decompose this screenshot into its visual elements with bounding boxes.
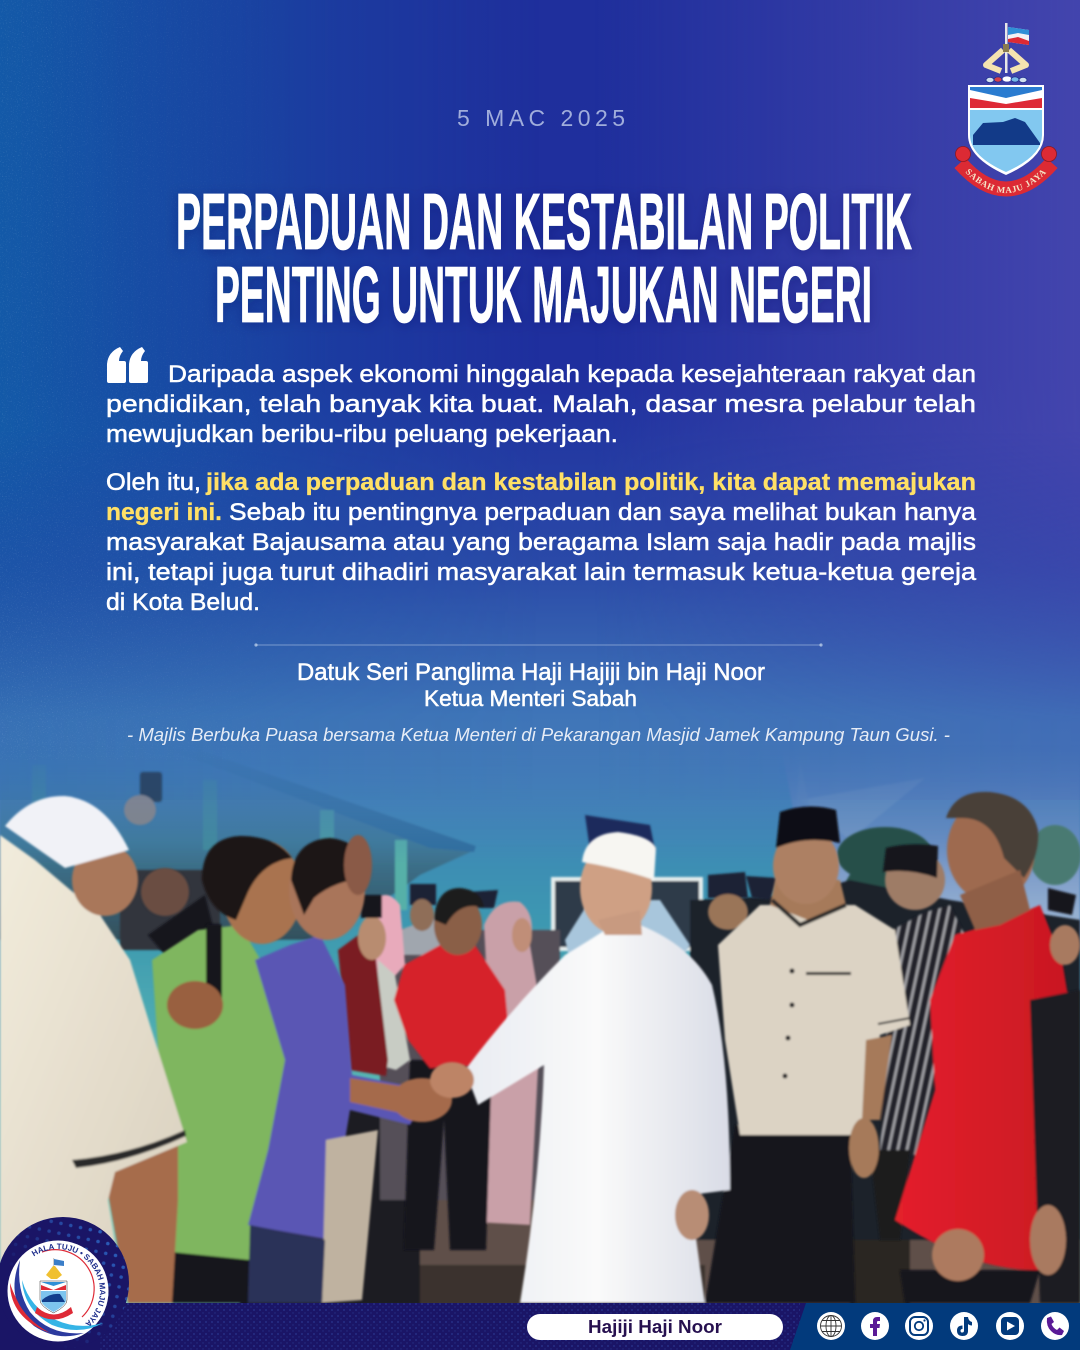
attribution: Ketua Menteri Sabah	[424, 686, 637, 711]
date: 5 MAC 2025	[457, 105, 625, 131]
icon: phone	[1041, 1312, 1069, 1340]
man in striped shirt	[870, 844, 970, 1240]
event caption: - Majlis Berbuka Puasa bersama Ketua Menteri di Pekarangan Masjid Jamek Kampung Taun Gusi. -	[127, 725, 950, 745]
flag and pole	[1005, 23, 1029, 73]
icon: facebook	[861, 1312, 889, 1340]
quote paragraph two with highlight: ini, tetapi juga turut dihadiri masyarakat lain termasuk ketua-ketua gereja	[106, 559, 976, 586]
social icons	[817, 1312, 1069, 1340]
attribution: Datuk Seri Panglima Haji Hajiji bin Haji Noor	[297, 659, 765, 686]
background person: woman left	[141, 868, 189, 916]
ground	[380, 1195, 1080, 1305]
quote paragraph two with highlight: di Kota Belud.	[106, 589, 260, 616]
title	[176, 177, 912, 339]
window	[553, 879, 701, 949]
icon: quotation mark	[107, 347, 148, 383]
quote paragraph one	[106, 361, 976, 448]
quote paragraph two with highlight: Oleh itu,	[106, 469, 201, 496]
man in khaki shirt, black songkok	[705, 806, 910, 1303]
man in red shirt with pants	[394, 888, 510, 1250]
back songkok men	[585, 815, 655, 850]
quote paragraph one: mewujudkan beribu-ribu peluang pekerjaan.	[106, 421, 618, 448]
icon: instagram	[905, 1312, 933, 1340]
quote paragraph two with highlight	[106, 469, 976, 616]
shield	[968, 85, 1044, 175]
small man, grey shirt	[400, 915, 445, 955]
quote paragraph one: pendidikan, telah banyak kita buat. Malah, dasar mesra pelabur telah	[106, 391, 976, 418]
photo backdrop: building and sky	[0, 740, 1080, 1310]
name pill: Hajiji Haji Noor	[588, 1317, 722, 1337]
front man in cream shirt and white cap	[0, 796, 187, 1303]
blue shirt man with handshake arm	[248, 835, 474, 1303]
coat of arms	[954, 23, 1058, 196]
attribution	[297, 659, 765, 711]
quote paragraph two with highlight: masyarakat Bajausama atau yang beragama Islam saja hadir pada majlis	[106, 529, 976, 556]
dark back crowd	[120, 870, 220, 950]
divider	[254, 643, 823, 647]
centre man in white robe and cap	[465, 832, 730, 1303]
badge: Hala Tuju Sabah Maju Jaya	[0, 1217, 129, 1343]
icon: youtube	[996, 1312, 1024, 1340]
icon: tiktok	[950, 1312, 978, 1340]
man in bright red shirt on right	[895, 792, 1080, 1303]
palm trees	[835, 825, 1080, 900]
name pill	[527, 1314, 783, 1340]
green shirt man	[152, 836, 310, 1303]
light blue shirt behind centre	[565, 900, 690, 960]
quote text	[106, 361, 976, 616]
crest beads	[986, 76, 1027, 83]
pink hijab woman small	[368, 895, 405, 990]
footer bar	[0, 1303, 1080, 1350]
badge: Hala Tuju Sabah Maju Jaya: HALA TUJU • SABAH MAJU JAYA	[31, 1244, 106, 1326]
quote paragraph two with highlight: negeri ini.	[106, 499, 222, 526]
crest arms	[986, 44, 1026, 71]
batik and grey blouse person	[378, 960, 410, 1070]
ribbon: SABAH MAJU JAYA	[966, 169, 1046, 194]
raised hand with phone	[124, 772, 162, 825]
quote paragraph one: Daripada aspek ekonomi hinggalah kepada kesejahteraan rakyat dan	[168, 361, 976, 388]
pink hijab woman	[474, 901, 541, 1225]
photo: event crowd	[0, 740, 1080, 1310]
quote paragraph two with highlight: jika ada perpaduan dan kestabilan politik, kita dapat memajukan	[205, 469, 976, 496]
icon: website	[817, 1312, 845, 1340]
badge emblem	[35, 1258, 73, 1320]
ribbon	[954, 146, 1058, 196]
quote paragraph two with highlight: Sebab itu pentingnya perpaduan dan saya melihat bukan hanya	[229, 499, 976, 526]
